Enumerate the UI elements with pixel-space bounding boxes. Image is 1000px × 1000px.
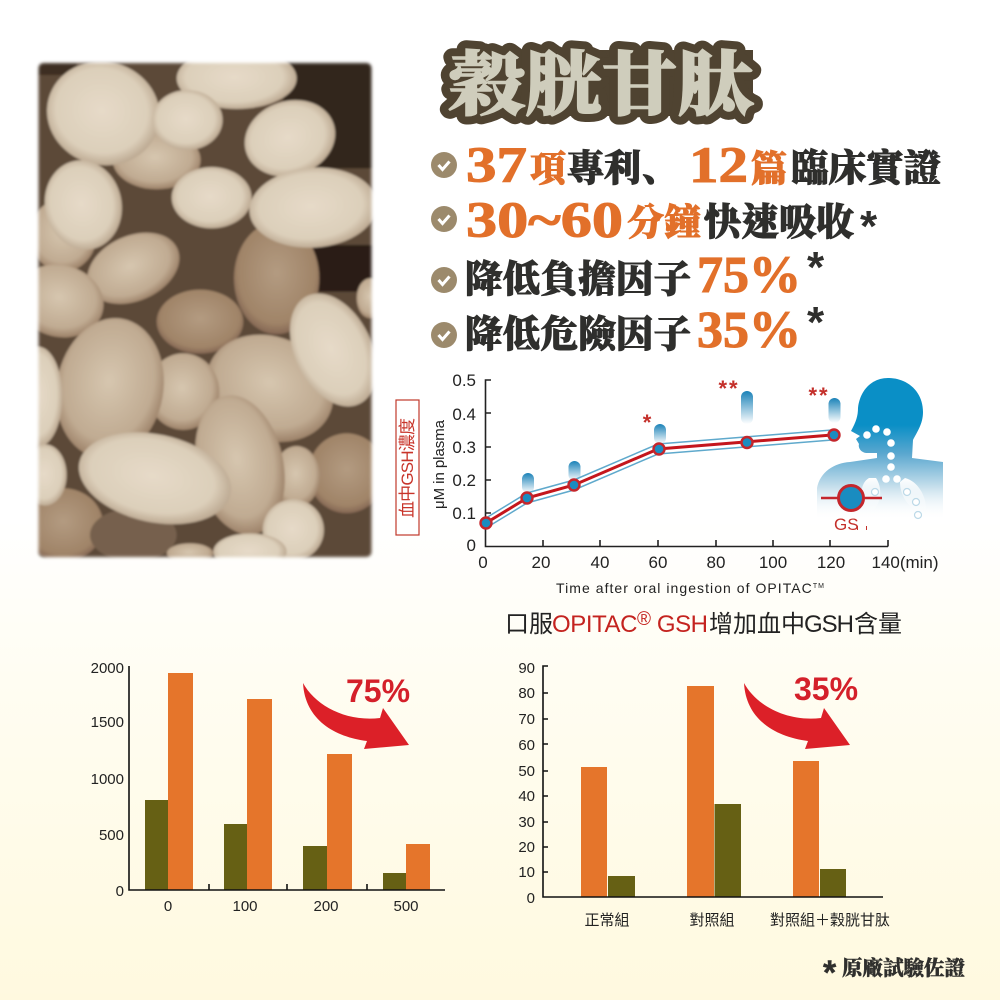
significance stars: *	[643, 410, 652, 435]
y labels: 10	[518, 864, 535, 881]
y labels: 30	[518, 814, 535, 831]
y labels: 1500	[91, 714, 124, 731]
bars	[145, 673, 430, 890]
bullet: risk factor down 35%: 降低危險因子	[465, 314, 691, 356]
x tick labels: 100	[759, 553, 787, 572]
x labels: 對照組＋穀胱甘肽	[770, 912, 890, 929]
bullet: 37 patents, 12 clinical papers	[431, 138, 941, 194]
y tick labels: 0.4	[452, 405, 476, 424]
x labels: 正常組	[584, 912, 630, 929]
x axis title: Time after oral ingestion of OPITAC	[556, 580, 812, 596]
bullet: 37 patents, 12 clinical papers: 項	[530, 149, 568, 189]
title: 穀胱甘肽	[449, 47, 754, 124]
chart caption: GSH	[651, 611, 708, 638]
bullet: 37 patents, 12 clinical papers: 臨床實證	[791, 147, 941, 190]
y tick labels: 0.2	[452, 471, 476, 490]
y tick labels: 0	[467, 536, 476, 555]
bars	[581, 686, 846, 897]
axes	[129, 666, 445, 890]
y axis title: μM in plasma	[431, 419, 448, 509]
footnote: *	[823, 954, 837, 992]
arrow: 35 percent drop	[744, 683, 850, 749]
y labels: 50	[518, 763, 535, 780]
bullet: absorbed in 30-60 minutes: 快速吸收	[704, 202, 854, 244]
confidence band and mean line	[486, 430, 832, 528]
x axis title: TM	[813, 583, 824, 590]
icon: human body with GSH	[817, 378, 943, 534]
y tick labels: 0.1	[452, 504, 476, 523]
x tick labels: 80	[707, 553, 725, 572]
bullet: risk factor down 35%: *	[807, 298, 825, 347]
y labels	[91, 660, 124, 900]
footnote: 原廠試驗佐證	[842, 956, 965, 980]
bullet: absorbed in 30-60 minutes: 分鐘	[627, 202, 701, 244]
x tick labels: 20	[532, 553, 550, 572]
x tick labels: 0	[478, 553, 488, 572]
y labels: 0	[116, 883, 124, 900]
y labels: 90	[518, 660, 535, 677]
y labels: 40	[518, 788, 535, 805]
vertical label box: 血中GSH濃度	[398, 418, 417, 518]
bullet: risk factor down 35%: 35%	[697, 302, 801, 359]
significance pills	[522, 391, 840, 493]
y tick labels: 0.3	[452, 438, 476, 457]
bullet list	[431, 138, 941, 359]
bullet: burden factor down 75%	[431, 243, 825, 304]
x labels	[584, 912, 890, 929]
y labels: 0	[527, 890, 535, 907]
bullet: 37 patents, 12 clinical papers: 12	[689, 138, 748, 194]
bullet: 37 patents, 12 clinical papers: 專利	[567, 148, 641, 190]
bullet: burden factor down 75%: *	[807, 243, 825, 292]
vertical label box	[396, 400, 419, 535]
y labels: 80	[518, 685, 535, 702]
y tick labels: 0.5	[452, 371, 476, 390]
y labels	[518, 660, 535, 907]
significance stars	[643, 376, 830, 435]
chart caption: 增加血中	[709, 611, 805, 638]
bar chart: burden factor	[91, 660, 445, 915]
icon: human body with GSH: GS	[834, 515, 859, 534]
bullet: 37 patents, 12 clinical papers: 篇	[751, 149, 787, 189]
y labels: 60	[518, 737, 535, 754]
bar chart: risk factor	[518, 660, 890, 929]
x tick labels	[478, 553, 938, 572]
x tick labels: 60	[649, 553, 667, 572]
bullet: absorbed in 30-60 minutes: *	[860, 202, 878, 251]
axes	[543, 666, 883, 897]
y labels: 1000	[91, 771, 124, 788]
chart caption: ®	[637, 609, 651, 630]
x tick labels: 40	[591, 553, 609, 572]
bullet: burden factor down 75%: 75%	[697, 247, 801, 304]
data points	[480, 430, 840, 528]
panel: yeast photograph	[36, 60, 374, 560]
x labels: 200	[313, 898, 339, 915]
line chart: plasma GSH over time	[396, 371, 943, 596]
x labels: 0	[164, 898, 172, 915]
axes	[486, 380, 888, 546]
x labels: 對照組	[689, 912, 735, 929]
bullet: burden factor down 75%: 降低負擔因子	[465, 259, 691, 301]
arrow: 75 percent drop	[303, 683, 409, 749]
bullet: 37 patents, 12 clinical papers: 、	[642, 149, 679, 190]
significance stars: **	[808, 383, 830, 408]
title: 穀胱甘肽	[449, 47, 754, 124]
chart caption: 口服	[505, 611, 553, 638]
y tick labels	[452, 371, 476, 555]
bullet: risk factor down 35%	[431, 298, 825, 359]
footnote	[823, 954, 965, 992]
y labels: 70	[518, 711, 535, 728]
label: 35%: 35%	[794, 671, 858, 707]
label: 75%: 75%	[346, 673, 410, 709]
x tick labels: 140(min)	[872, 553, 938, 572]
x labels: 100	[232, 898, 258, 915]
chart caption: GSH	[804, 611, 854, 638]
chart caption: OPITAC	[552, 611, 637, 638]
significance stars: **	[718, 376, 740, 401]
bullet: absorbed in 30-60 minutes	[431, 193, 878, 251]
y labels: 500	[99, 827, 124, 844]
y labels: 2000	[91, 660, 124, 677]
chart caption: 含量	[854, 611, 902, 638]
bullet: absorbed in 30-60 minutes: 30~60	[466, 193, 623, 249]
bullet: 37 patents, 12 clinical papers: 37	[466, 138, 527, 194]
x labels	[164, 898, 419, 915]
chart caption	[505, 609, 902, 638]
x tick labels: 120	[817, 553, 845, 572]
y labels: 20	[518, 839, 535, 856]
x labels: 500	[393, 898, 419, 915]
